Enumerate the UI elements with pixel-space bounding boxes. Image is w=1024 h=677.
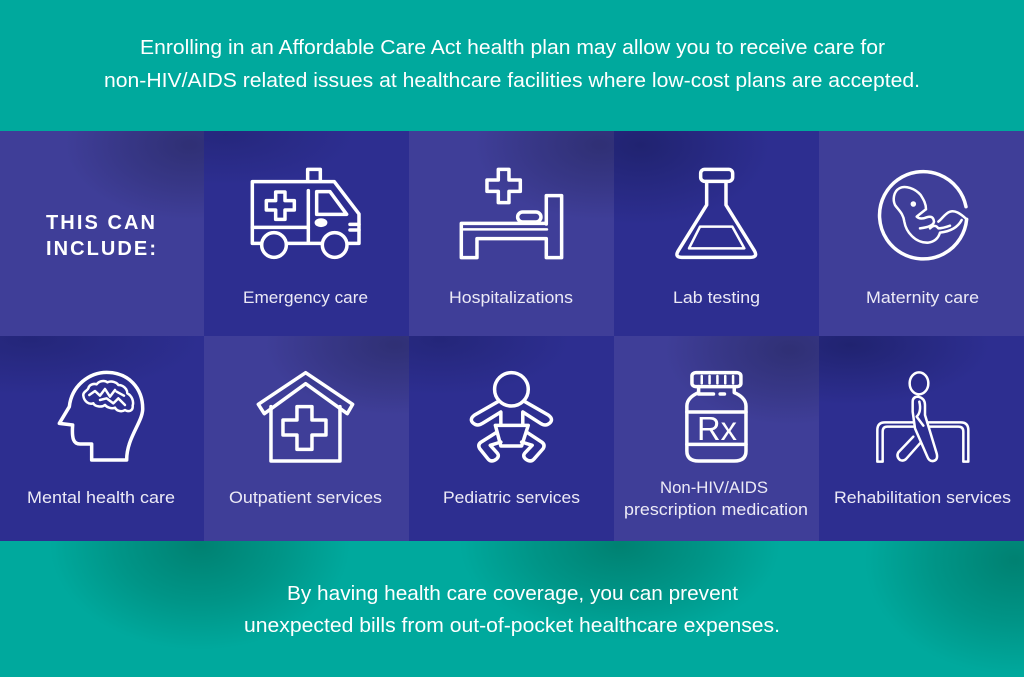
- heading: this can include: INCLUDE:: [46, 238, 156, 260]
- label: Mental health care: [27, 489, 175, 507]
- cell: lab testing: [673, 169, 760, 307]
- cell: prescription medication: [624, 373, 808, 519]
- intro text: [104, 37, 920, 92]
- heading: this can include: THIS CAN: [46, 212, 155, 234]
- heading: this can include: [46, 212, 156, 260]
- panel: services grid background: [0, 131, 1024, 541]
- cell: rehabilitation services: [834, 372, 1011, 507]
- cell: outpatient services: [229, 373, 382, 507]
- cell: mental health care: [27, 372, 175, 507]
- label: Rehabilitation services: [834, 489, 1011, 507]
- closing text: By having health care coverage, you can prevent: [287, 583, 738, 605]
- icon: ambulance: [252, 169, 359, 257]
- cell: maternity care: [866, 172, 979, 307]
- label: Emergency care: [243, 289, 368, 307]
- label: Lab testing: [673, 289, 760, 307]
- intro text: non-HIV/AIDS related issues at healthcare facilities where low-cost plans are accepted.: [104, 70, 920, 92]
- icon: flask: [677, 169, 756, 257]
- label: Non-HIV/AIDS: [660, 479, 768, 497]
- cell: emergency care: [243, 169, 368, 307]
- label: Pediatric services: [443, 489, 580, 507]
- icon: head with brain: [59, 372, 143, 460]
- icon: person walking between bars: [877, 372, 968, 462]
- icon: hospital bed: [461, 169, 562, 258]
- icon: baby: [471, 373, 551, 461]
- label: Outpatient services: [229, 489, 382, 507]
- label: Hospitalizations: [449, 289, 573, 307]
- icon: Rx bottle: [687, 373, 746, 461]
- icon: Rx bottle: Rx: [697, 410, 737, 447]
- closing text: [244, 583, 780, 637]
- closing text: unexpected bills from out-of-pocket healthcare expenses.: [244, 615, 780, 637]
- footer shadows: [75, 541, 1024, 656]
- cell: hospitalizations: [449, 169, 573, 307]
- label: prescription medication: [624, 501, 808, 519]
- cell: pediatric services: [443, 373, 580, 507]
- label: Maternity care: [866, 289, 979, 307]
- icon: house with cross: [258, 373, 353, 461]
- label: [624, 479, 808, 519]
- icon: fetus in circle: [880, 172, 967, 259]
- intro text: Enrolling in an Affordable Care Act health plan may allow you to receive care for: [140, 37, 885, 59]
